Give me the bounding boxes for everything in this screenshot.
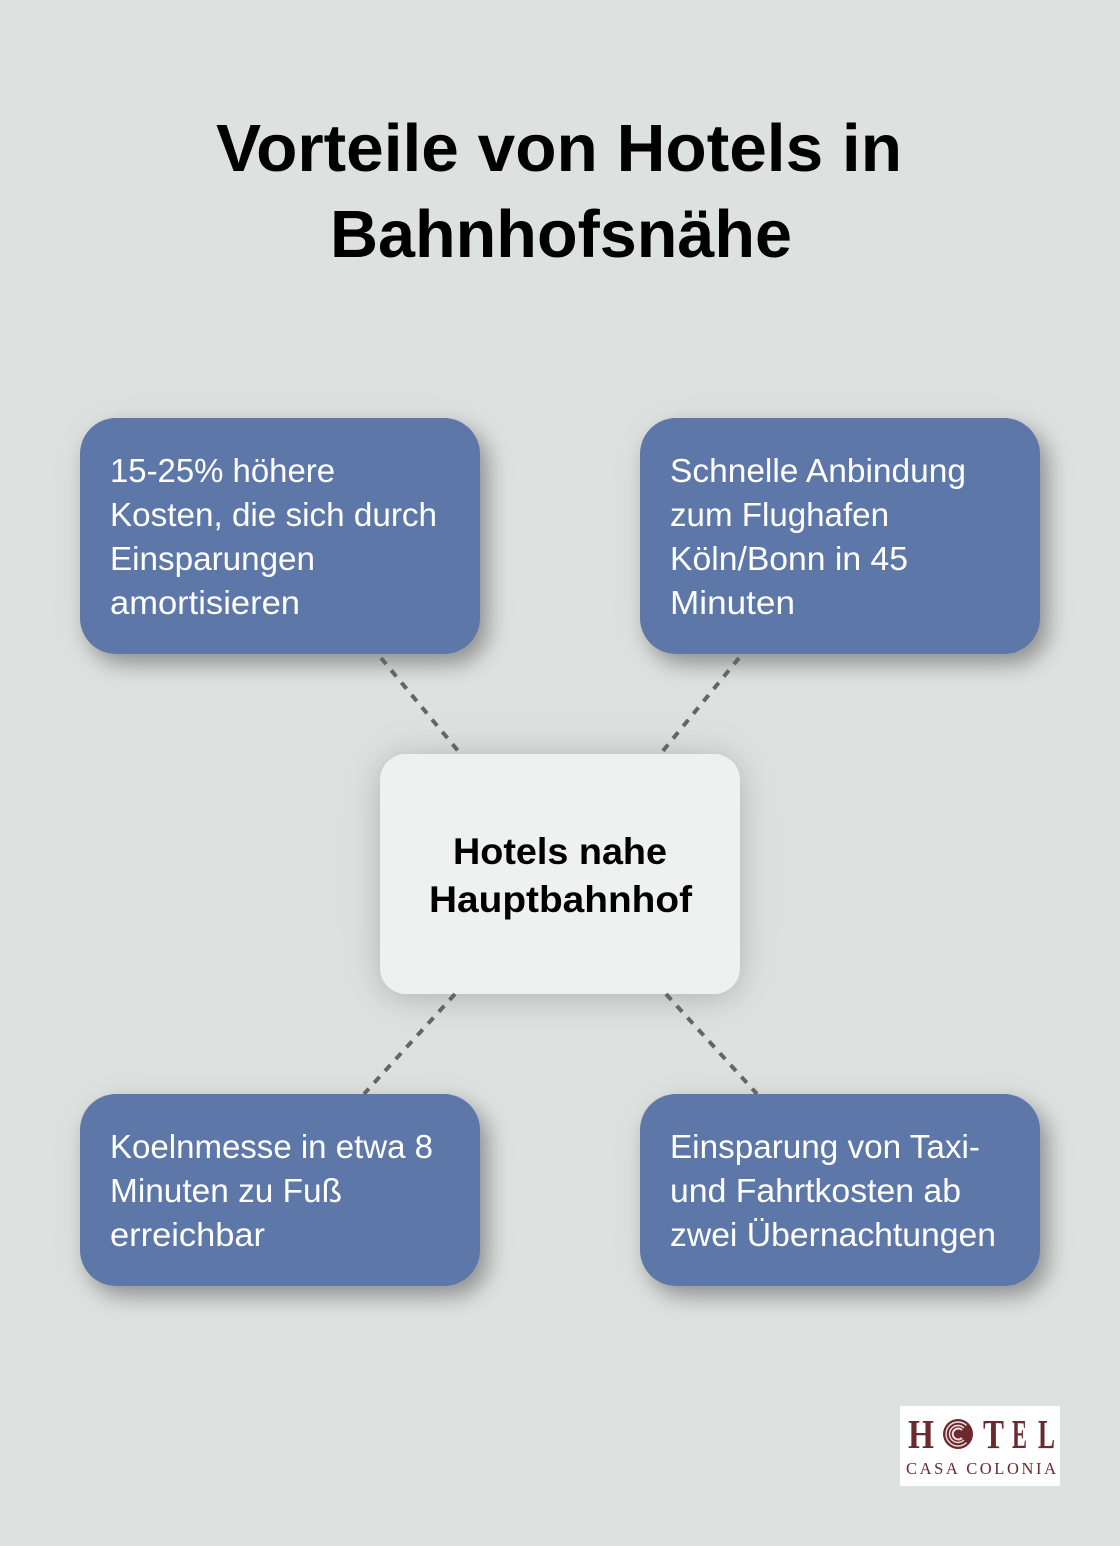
logo: Hotel Casa Colonia: E	[1012, 1411, 1027, 1457]
logo: Hotel Casa Colonia	[900, 1406, 1060, 1486]
title: Vorteile von Hotels in	[216, 111, 902, 186]
logo: Hotel Casa Colonia: L	[1038, 1411, 1055, 1457]
panel: koelnmesse	[80, 1094, 480, 1286]
panel: flughafen: Köln/Bonn in 45	[670, 540, 908, 577]
panel: koelnmesse: Koelnmesse in etwa 8	[110, 1128, 433, 1165]
panel: koelnmesse: Minuten zu Fuß	[110, 1172, 342, 1209]
title	[216, 111, 902, 272]
logo: Hotel Casa Colonia: T	[983, 1411, 1004, 1457]
panel: flughafen: Schnelle Anbindung	[670, 452, 966, 489]
connectors: dashed lines	[362, 656, 758, 1096]
panel: koelnmesse: erreichbar	[110, 1216, 265, 1253]
logo: Hotel Casa Colonia: CASA COLONIA	[906, 1459, 1056, 1478]
panel: center hub: Hauptbahnhof	[429, 879, 693, 920]
panel: kosten: Einsparungen	[110, 540, 315, 577]
panel: center hub: Hotels nahe	[453, 831, 667, 872]
panel: einsparung	[640, 1094, 1040, 1286]
panel: kosten: amortisieren	[110, 584, 300, 621]
panel: einsparung: Einsparung von Taxi-	[670, 1128, 980, 1165]
panel: kosten	[80, 418, 480, 654]
panel: flughafen	[640, 418, 1040, 654]
logo: Hotel Casa Colonia: H	[908, 1411, 934, 1457]
panel: center hub	[380, 754, 740, 994]
panel: einsparung: zwei Übernachtungen	[670, 1216, 996, 1253]
panel: kosten: Kosten, die sich durch	[110, 496, 437, 533]
panel: flughafen: zum Flughafen	[670, 496, 889, 533]
panel: flughafen: Minuten	[670, 584, 795, 621]
panel: kosten: 15-25% höhere	[110, 452, 335, 489]
panel: einsparung: und Fahrtkosten ab	[670, 1172, 961, 1209]
title: Bahnhofsnähe	[330, 197, 792, 272]
